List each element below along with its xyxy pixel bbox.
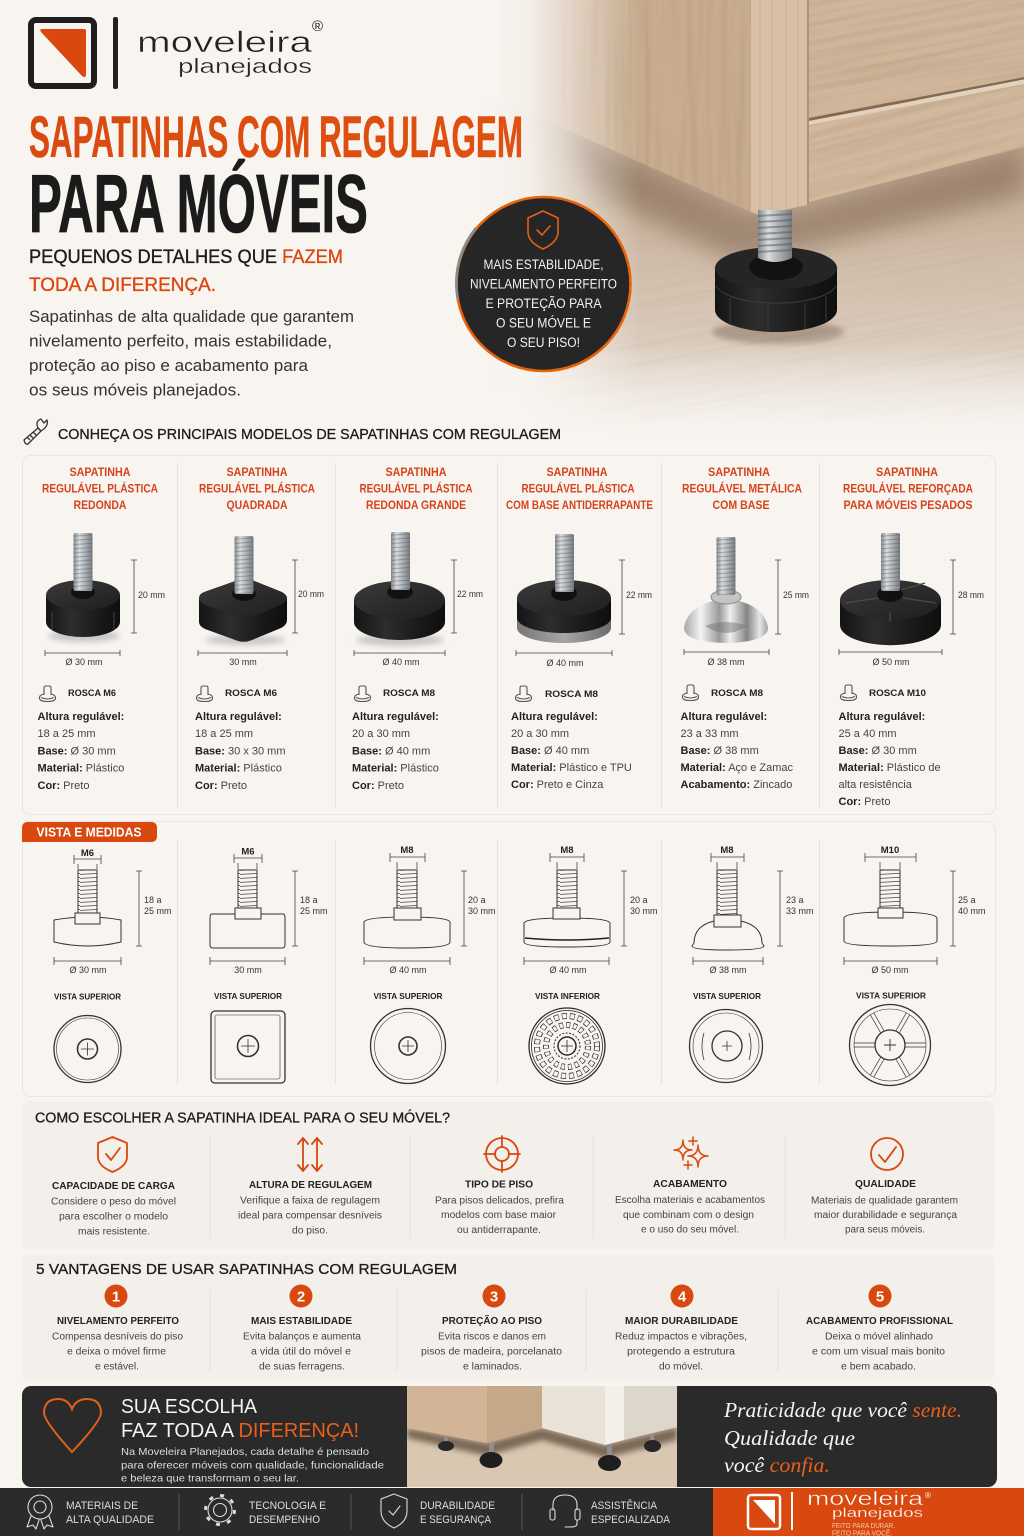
choice: height: Verifique a faixa de regulagem xyxy=(240,1196,380,1206)
model card 6 xyxy=(838,465,984,808)
top view xyxy=(370,1008,446,1084)
dimensions: 28 mm xyxy=(958,590,984,600)
model name: SAPATINHA xyxy=(708,465,770,479)
advantage 4: Reduz impactos e vibrações, xyxy=(615,1332,747,1342)
dimensions xyxy=(45,560,165,667)
thread spec xyxy=(354,686,435,702)
thread spec xyxy=(840,685,926,700)
model name xyxy=(199,465,315,512)
technical drawing 1: VISTA SUPERIOR xyxy=(54,992,121,1002)
footer logo block: moveleira xyxy=(807,1489,924,1510)
advantage 3: pisos de madeira, porcelanato xyxy=(421,1346,562,1358)
advantage 4: MAIOR DURABILIDADE xyxy=(625,1315,738,1327)
thread spec xyxy=(196,686,277,702)
dimensions: 20 mm xyxy=(138,590,165,600)
technical drawing 5: Ø 38 mm xyxy=(709,965,747,975)
advantage 1: e estável. xyxy=(95,1362,139,1372)
callout badge xyxy=(456,197,630,371)
product photo xyxy=(517,534,611,643)
model name: REGULÁVEL PLÁSTICA xyxy=(522,480,635,496)
product photo xyxy=(684,537,768,643)
number 3 xyxy=(482,1284,506,1308)
technical drawing 5: 23 a xyxy=(786,895,804,905)
spec list: Base: Ø 40 mm xyxy=(352,746,430,758)
script slogan xyxy=(723,1398,962,1477)
spec list xyxy=(838,711,941,808)
spec list: Altura regulável: xyxy=(838,711,925,723)
model card 1 xyxy=(38,465,165,792)
model name: PARA MÓVEIS PESADOS xyxy=(844,497,972,512)
spec list: Base: Ø 30 mm xyxy=(38,746,116,758)
spec list: Altura regulável: xyxy=(511,711,598,723)
number 4: 4 xyxy=(678,1288,687,1306)
product photo xyxy=(46,533,120,642)
dimensions: Ø 50 mm xyxy=(872,657,910,667)
icon: gear xyxy=(206,1496,234,1524)
footer item: technology: TECNOLOGIA E xyxy=(249,1500,326,1512)
spec list xyxy=(195,711,286,792)
bottom view xyxy=(529,1008,605,1084)
footer item: materials xyxy=(27,1495,154,1529)
choice: floor type: Para pisos delicados, prefira xyxy=(435,1196,564,1206)
number 5 xyxy=(868,1284,892,1308)
advantage 5 xyxy=(806,1284,954,1372)
intro paragraph: proteção ao piso e acabamento para xyxy=(29,356,309,375)
advantage 2: a vida útil do móvel e xyxy=(251,1346,351,1358)
footer logo block: ® xyxy=(925,1491,931,1500)
intro paragraph: os seus móveis planejados. xyxy=(29,380,241,400)
icon: up and down arrows xyxy=(298,1138,322,1171)
thread spec xyxy=(39,686,116,702)
footer logo block: planejados xyxy=(832,1505,924,1520)
spec list xyxy=(511,711,632,791)
advantage 2: de suas ferragens. xyxy=(259,1362,345,1372)
top view xyxy=(54,1016,121,1082)
spec list: Material: Aço e Zamac xyxy=(680,762,794,774)
footer item: support: ESPECIALIZADA xyxy=(591,1514,671,1526)
spec list: alta resistência xyxy=(838,779,913,791)
dimensions: 22 mm xyxy=(457,589,483,599)
model name: REGULÁVEL PLÁSTICA xyxy=(360,480,473,496)
spec list: 20 a 30 mm xyxy=(511,728,569,740)
model name xyxy=(360,465,473,512)
number 2: 2 xyxy=(297,1288,305,1306)
technical drawing 4: 20 a xyxy=(630,895,648,905)
technical drawing 1: Ø 30 mm xyxy=(69,965,107,975)
dimensions: Ø 38 mm xyxy=(707,657,745,667)
spec list: Material: Plástico xyxy=(195,762,282,774)
spec list: Acabamento: Zincado xyxy=(680,779,792,791)
thread spec: ROSCA M10 xyxy=(869,688,926,699)
icon: heart xyxy=(44,1399,101,1452)
technical drawing 6: 40 mm xyxy=(958,906,986,916)
top view xyxy=(850,1004,930,1086)
model name: REGULÁVEL PLÁSTICA xyxy=(42,480,158,496)
spec list: Altura regulável: xyxy=(38,711,124,723)
dimensions: Ø 40 mm xyxy=(546,658,584,668)
spec list: Cor: Preto xyxy=(38,780,89,792)
technical drawing 2: 30 mm xyxy=(234,965,262,975)
footer item: durability: DURABILIDADE xyxy=(420,1500,495,1512)
choice: quality xyxy=(811,1138,958,1236)
technical drawing 5 xyxy=(690,845,814,1082)
logo: ® xyxy=(312,18,323,35)
logo: planejados xyxy=(178,56,312,78)
thread spec: ROSCA M8 xyxy=(711,688,763,699)
technical drawing 4: 30 mm xyxy=(630,906,658,916)
advantage 1 xyxy=(52,1284,183,1372)
model name: REGULÁVEL REFORÇADA xyxy=(843,480,973,496)
spec list: 25 a 40 mm xyxy=(838,728,897,740)
technical drawing 3 xyxy=(364,845,496,1084)
thread spec: ROSCA M8 xyxy=(545,689,598,700)
technical drawing 2: M6 xyxy=(241,846,255,858)
icon: check circle xyxy=(871,1138,903,1170)
panel: how to choose xyxy=(22,1101,995,1249)
model name: REGULÁVEL PLÁSTICA xyxy=(199,480,315,496)
spec list: 18 a 25 mm xyxy=(38,728,96,740)
dimensions: Ø 40 mm xyxy=(382,657,420,667)
banner photo: two cabinets xyxy=(407,1386,677,1487)
dimensions: Ø 30 mm xyxy=(65,657,103,667)
spec list: Material: Plástico xyxy=(38,762,124,774)
advantage 5: Deixa o móvel alinhado xyxy=(825,1332,933,1342)
technical drawing 6 xyxy=(844,845,986,1086)
model name xyxy=(506,465,653,512)
title line 1: SAPATINHAS COM REGULAGEM xyxy=(29,105,523,170)
model name: SAPATINHA xyxy=(546,465,608,479)
technical drawing 4: VISTA INFERIOR xyxy=(535,991,600,1001)
dimensions: 25 mm xyxy=(783,590,809,600)
dimensions: 20 mm xyxy=(298,589,324,599)
panel: 5 advantages xyxy=(22,1254,995,1381)
panel: views and measurements xyxy=(22,822,996,1096)
spec list: Altura regulável: xyxy=(680,711,767,723)
choice: height: ideal para compensar desníveis xyxy=(238,1210,382,1222)
banner text: Na Moveleira Planejados, cada detalhe é pensado xyxy=(121,1446,369,1458)
icon: shield xyxy=(528,211,558,249)
technical drawing 4 xyxy=(524,845,658,1084)
spec list: Material: Plástico de xyxy=(838,762,941,774)
dimensions xyxy=(839,560,984,667)
spec list: Base: Ø 38 mm xyxy=(680,745,759,757)
thread spec xyxy=(682,685,763,700)
section heading: models xyxy=(24,419,561,444)
callout badge: NIVELAMENTO PERFEITO xyxy=(470,276,617,292)
choice: finish: Escolha materiais e acabamentos xyxy=(615,1195,765,1206)
spec list: Material: Plástico e TPU xyxy=(511,762,632,774)
advantage 5: ACABAMENTO PROFISSIONAL xyxy=(806,1315,954,1327)
choice: height xyxy=(238,1138,382,1236)
advantage 5: e bem acabado. xyxy=(841,1362,916,1372)
product photo xyxy=(199,536,287,645)
technical drawing 4: M8 xyxy=(560,845,574,856)
tab: vista e medidas: VISTA E MEDIDAS xyxy=(36,826,142,840)
choice: load capacity: para escolher o modelo xyxy=(59,1212,168,1222)
choice: floor type: ou antiderrapante. xyxy=(457,1225,541,1236)
technical drawing 1: 25 mm xyxy=(144,906,172,916)
choice: floor type: TIPO DE PISO xyxy=(465,1178,533,1190)
number 5: 5 xyxy=(876,1288,884,1306)
advantage 4: protegendo a estrutura xyxy=(627,1346,735,1358)
choice: load capacity: CAPACIDADE DE CARGA xyxy=(52,1180,175,1192)
technical drawing 4: Ø 40 mm xyxy=(549,965,587,975)
banner heading: FAZ TODA A DIFERENÇA! xyxy=(121,1420,359,1442)
model card 2 xyxy=(195,465,324,792)
icon: target xyxy=(484,1136,520,1172)
subtitle xyxy=(29,246,343,296)
footer item: durability: E SEGURANÇA xyxy=(420,1514,492,1526)
script slogan: você confia. xyxy=(724,1453,830,1477)
model name: QUADRADA xyxy=(226,498,288,512)
number 3: 3 xyxy=(490,1288,498,1306)
advantage 1: Compensa desníveis do piso xyxy=(52,1332,183,1342)
choice: finish: e o uso do seu móvel. xyxy=(641,1224,739,1236)
advantage 5: e com um visual mais bonito xyxy=(812,1346,945,1358)
spec list: Material: Plástico xyxy=(352,762,439,774)
heading: 5 VANTAGENS DE USAR SAPATINHAS COM REGULAGEM xyxy=(36,1261,457,1278)
subtitle: PEQUENOS DETALHES QUE FAZEM xyxy=(29,246,343,268)
choice: load capacity: mais resistente. xyxy=(78,1226,150,1238)
choice: height: ALTURA DE REGULAGEM xyxy=(249,1179,372,1191)
model name: COM BASE ANTIDERRAPANTE xyxy=(506,498,653,512)
spec list: 23 a 33 mm xyxy=(680,728,739,740)
choice: floor type xyxy=(435,1136,564,1236)
technical drawing 3: M8 xyxy=(400,845,414,856)
callout badge: O SEU MÓVEL E xyxy=(496,316,591,330)
technical drawing 2: VISTA SUPERIOR xyxy=(214,991,282,1001)
icon: wrench xyxy=(24,419,47,444)
logo xyxy=(31,17,323,89)
technical drawing 2 xyxy=(210,846,328,1083)
footer item: technology xyxy=(206,1496,326,1526)
advantage 3 xyxy=(421,1284,562,1372)
choice: quality: QUALIDADE xyxy=(855,1178,916,1190)
technical drawing 2: 25 mm xyxy=(300,906,328,916)
model card 5 xyxy=(680,465,809,791)
choice: finish xyxy=(615,1137,765,1236)
callout badge: O SEU PISO! xyxy=(507,335,580,350)
advantage 3: Evita riscos e danos em xyxy=(438,1332,546,1342)
model name: SAPATINHA xyxy=(386,465,447,479)
choice: height: do piso. xyxy=(292,1226,328,1236)
advantage 3: PROTEÇÃO AO PISO xyxy=(442,1314,542,1327)
spec list: Cor: Preto e Cinza xyxy=(511,779,604,791)
technical drawing 1: M6 xyxy=(81,848,94,859)
choice: finish: que combinam com o design xyxy=(623,1210,754,1221)
choice: quality: para seus móveis. xyxy=(845,1224,925,1236)
footer item: durability xyxy=(381,1494,495,1528)
technical drawing 3: VISTA SUPERIOR xyxy=(374,991,442,1001)
technical drawing 6: Ø 50 mm xyxy=(871,965,909,975)
spec list: Cor: Preto xyxy=(838,796,890,808)
technical drawing 6: VISTA SUPERIOR xyxy=(856,990,926,1000)
title line 2: PARA MÓVEIS xyxy=(29,157,368,250)
model name: SAPATINHA xyxy=(70,465,131,479)
footer logo block: FEITO PARA DURAR. xyxy=(832,1521,895,1530)
footer item: materials: MATERIAIS DE xyxy=(66,1500,138,1512)
icon: medal xyxy=(27,1495,53,1529)
spec list: Altura regulável: xyxy=(352,711,439,723)
dimensions xyxy=(684,560,809,667)
choice: load capacity xyxy=(51,1137,176,1238)
technical drawing 3: 30 mm xyxy=(468,906,496,916)
footer logo block xyxy=(713,1488,1024,1536)
choice: finish: ACABAMENTO xyxy=(653,1178,727,1190)
technical drawing 2: 18 a xyxy=(300,895,318,905)
technical drawing 6: 25 a xyxy=(958,895,976,905)
intro paragraph: Sapatinhas de alta qualidade que garantem xyxy=(29,307,354,326)
technical drawing 3: 20 a xyxy=(468,895,486,905)
model name xyxy=(843,465,973,512)
footer item: support xyxy=(550,1495,671,1527)
thread spec xyxy=(515,686,598,702)
main adjustable foot xyxy=(712,210,844,344)
advantage 2: MAIS ESTABILIDADE xyxy=(251,1315,352,1327)
callout badge: E PROTEÇÃO PARA xyxy=(486,296,602,311)
thread spec: ROSCA M6 xyxy=(225,688,277,699)
banner heading xyxy=(121,1396,359,1442)
technical drawing 5: 33 mm xyxy=(786,906,814,916)
model name xyxy=(42,465,158,512)
spec list: Altura regulável: xyxy=(195,711,282,723)
footer item: support: ASSISTÊNCIA xyxy=(591,1499,658,1512)
top view xyxy=(690,1010,762,1082)
technical drawing 3: Ø 40 mm xyxy=(389,965,427,975)
spec list: Base: Ø 30 mm xyxy=(838,745,917,757)
advantage 2: Evita balanços e aumenta xyxy=(243,1332,361,1342)
script slogan: Praticidade que você sente. xyxy=(723,1398,962,1422)
icon: shield check xyxy=(98,1137,127,1172)
tab: vista e medidas xyxy=(22,822,157,842)
hero photo: cabinet with adjustable foot xyxy=(524,0,1024,418)
footer item: technology: DESEMPENHO xyxy=(249,1514,320,1526)
model card 4 xyxy=(506,465,653,791)
technical drawing 5: VISTA SUPERIOR xyxy=(693,991,761,1001)
model name xyxy=(682,465,802,512)
icon: headset xyxy=(550,1495,580,1527)
spec list xyxy=(38,711,124,792)
spec list: Cor: Preto xyxy=(352,780,404,792)
advantage 3: e laminados. xyxy=(463,1362,522,1372)
spec list: 18 a 25 mm xyxy=(195,728,253,740)
banner xyxy=(22,1386,997,1487)
spec list xyxy=(680,711,794,791)
technical drawing 5: M8 xyxy=(720,845,734,856)
technical drawing 6: M10 xyxy=(881,845,899,856)
spec list xyxy=(352,711,439,792)
choice: quality: Materiais de qualidade garantem xyxy=(811,1196,958,1206)
subtitle: TODA A DIFERENÇA. xyxy=(29,274,216,296)
model name: REDONDA xyxy=(74,498,127,512)
panel: models xyxy=(22,456,996,814)
choice: quality: maior durabilidade e segurança xyxy=(814,1210,957,1221)
choice: floor type: modelos com base maior xyxy=(441,1210,557,1221)
thread spec: ROSCA M8 xyxy=(383,688,435,699)
logo: moveleira xyxy=(137,26,312,59)
choice: load capacity: Considere o peso do móvel xyxy=(51,1196,176,1208)
intro paragraph: nivelamento perfeito, mais estabilidade, xyxy=(29,332,332,350)
model name: SAPATINHA xyxy=(876,465,938,479)
footer item: materials: ALTA QUALIDADE xyxy=(66,1514,154,1526)
footer xyxy=(0,1488,1024,1536)
thread spec: ROSCA M6 xyxy=(68,688,116,699)
top view xyxy=(211,1011,285,1083)
dimensions xyxy=(354,560,483,667)
dimensions: 30 mm xyxy=(229,657,257,667)
product photo xyxy=(354,532,445,646)
banner text: para oferecer móveis com qualidade, funcionalidade xyxy=(121,1460,384,1472)
icon: shield xyxy=(381,1494,407,1528)
model card 3 xyxy=(352,465,483,792)
spec list: 20 a 30 mm xyxy=(352,728,410,740)
heading: COMO ESCOLHER A SAPATINHA IDEAL PARA O SEU MÓVEL? xyxy=(35,1110,450,1126)
model name: SAPATINHA xyxy=(226,465,288,479)
banner text: e beleza que transformam o seu lar. xyxy=(121,1472,299,1484)
banner text xyxy=(121,1446,384,1484)
spec list: Cor: Preto xyxy=(195,780,247,792)
advantage 4: do móvel. xyxy=(659,1362,703,1372)
dimensions xyxy=(516,560,652,668)
advantage 1: NIVELAMENTO PERFEITO xyxy=(57,1315,179,1327)
model name: COM BASE xyxy=(712,498,770,512)
technical drawing 1: 18 a xyxy=(144,895,162,905)
dimensions: 22 mm xyxy=(626,590,652,600)
model name: REGULÁVEL METÁLICA xyxy=(682,480,802,496)
callout badge: MAIS ESTABILIDADE, xyxy=(484,257,604,272)
intro paragraph xyxy=(29,307,354,400)
advantage 4 xyxy=(615,1284,747,1372)
script slogan: Qualidade que xyxy=(724,1426,855,1450)
advantage 2 xyxy=(243,1284,361,1372)
technical drawing 1 xyxy=(54,848,172,1082)
product photo xyxy=(840,533,941,645)
number 1: 1 xyxy=(112,1288,120,1306)
section heading: models: CONHEÇA OS PRINCIPAIS MODELOS DE SAPATINHAS COM REGULAGEM xyxy=(58,427,561,443)
dimensions xyxy=(198,560,324,667)
spec list: Base: Ø 40 mm xyxy=(511,745,589,757)
model name: REDONDA GRANDE xyxy=(366,498,466,512)
advantage 1: e deixa o móvel firme xyxy=(67,1346,166,1358)
spec list: Base: 30 x 30 mm xyxy=(195,746,286,758)
banner heading: SUA ESCOLHA xyxy=(121,1396,258,1418)
icon: sparkles xyxy=(674,1137,708,1169)
